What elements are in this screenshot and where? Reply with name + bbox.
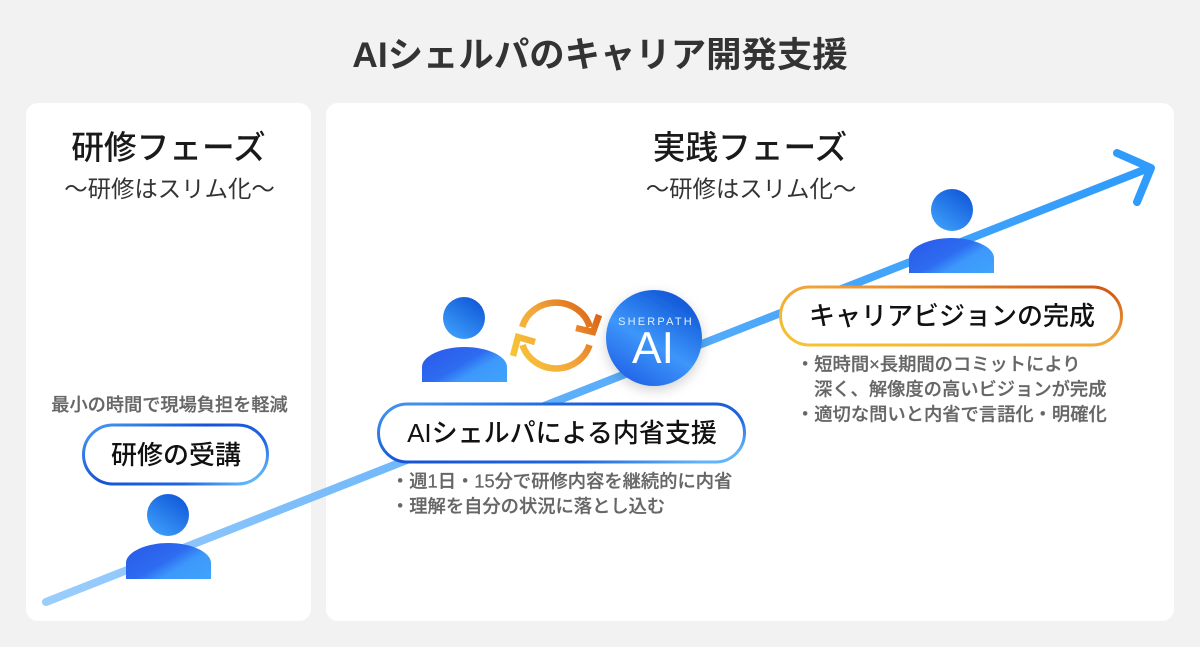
icon: person reflecting (422, 297, 507, 382)
text block: reflection support points (391, 470, 732, 516)
icon: Sherpath AI badge: SHERPATH (618, 316, 694, 328)
icon: Sherpath AI badge (606, 290, 702, 386)
subheading: practice phase: ～研修はスリム化～ (646, 176, 856, 202)
text block: reflection support points: ・理解を自分の状況に落とし込む (391, 496, 665, 516)
subheading: training phase: ～研修はスリム化～ (64, 176, 275, 202)
pill: training attendance (84, 425, 268, 484)
icon: Sherpath AI badge: AI (632, 324, 674, 373)
heading: practice phase: 実践フェーズ (653, 129, 847, 166)
panel: training phase (26, 103, 311, 621)
pill: career vision completion: キャリアビジョンの完成 (809, 301, 1095, 331)
pill: AI Sherpa reflection support: AIシェルパによる内省支援 (407, 418, 717, 448)
icon: cycle arrows (513, 303, 599, 368)
text block: career vision points: ・短時間×長期間のコミットにより (796, 354, 1081, 374)
text block: career vision points: ・適切な問いと内省で言語化・明確化 (796, 404, 1107, 424)
text block: career vision points (796, 354, 1107, 424)
icon: person career vision (909, 189, 994, 273)
pill: training attendance: 研修の受講 (111, 440, 241, 470)
heading: training phase: 研修フェーズ (71, 129, 266, 166)
pill: career vision completion (780, 287, 1122, 345)
icon: person training (126, 494, 211, 579)
callout: minimum time note: 最小の時間で現場負担を軽減 (51, 395, 288, 415)
panel: practice phase (326, 103, 1174, 621)
title: AIシェルパのキャリア開発支援 (352, 35, 848, 75)
text block: reflection support points: ・週1日・15分で研修内容を継続的に内省 (391, 470, 732, 492)
text block: career vision points: 深く、解像度の高いビジョンが完成 (814, 378, 1106, 400)
arrow: growth line (46, 153, 1151, 602)
pill: AI Sherpa reflection support (378, 404, 744, 462)
